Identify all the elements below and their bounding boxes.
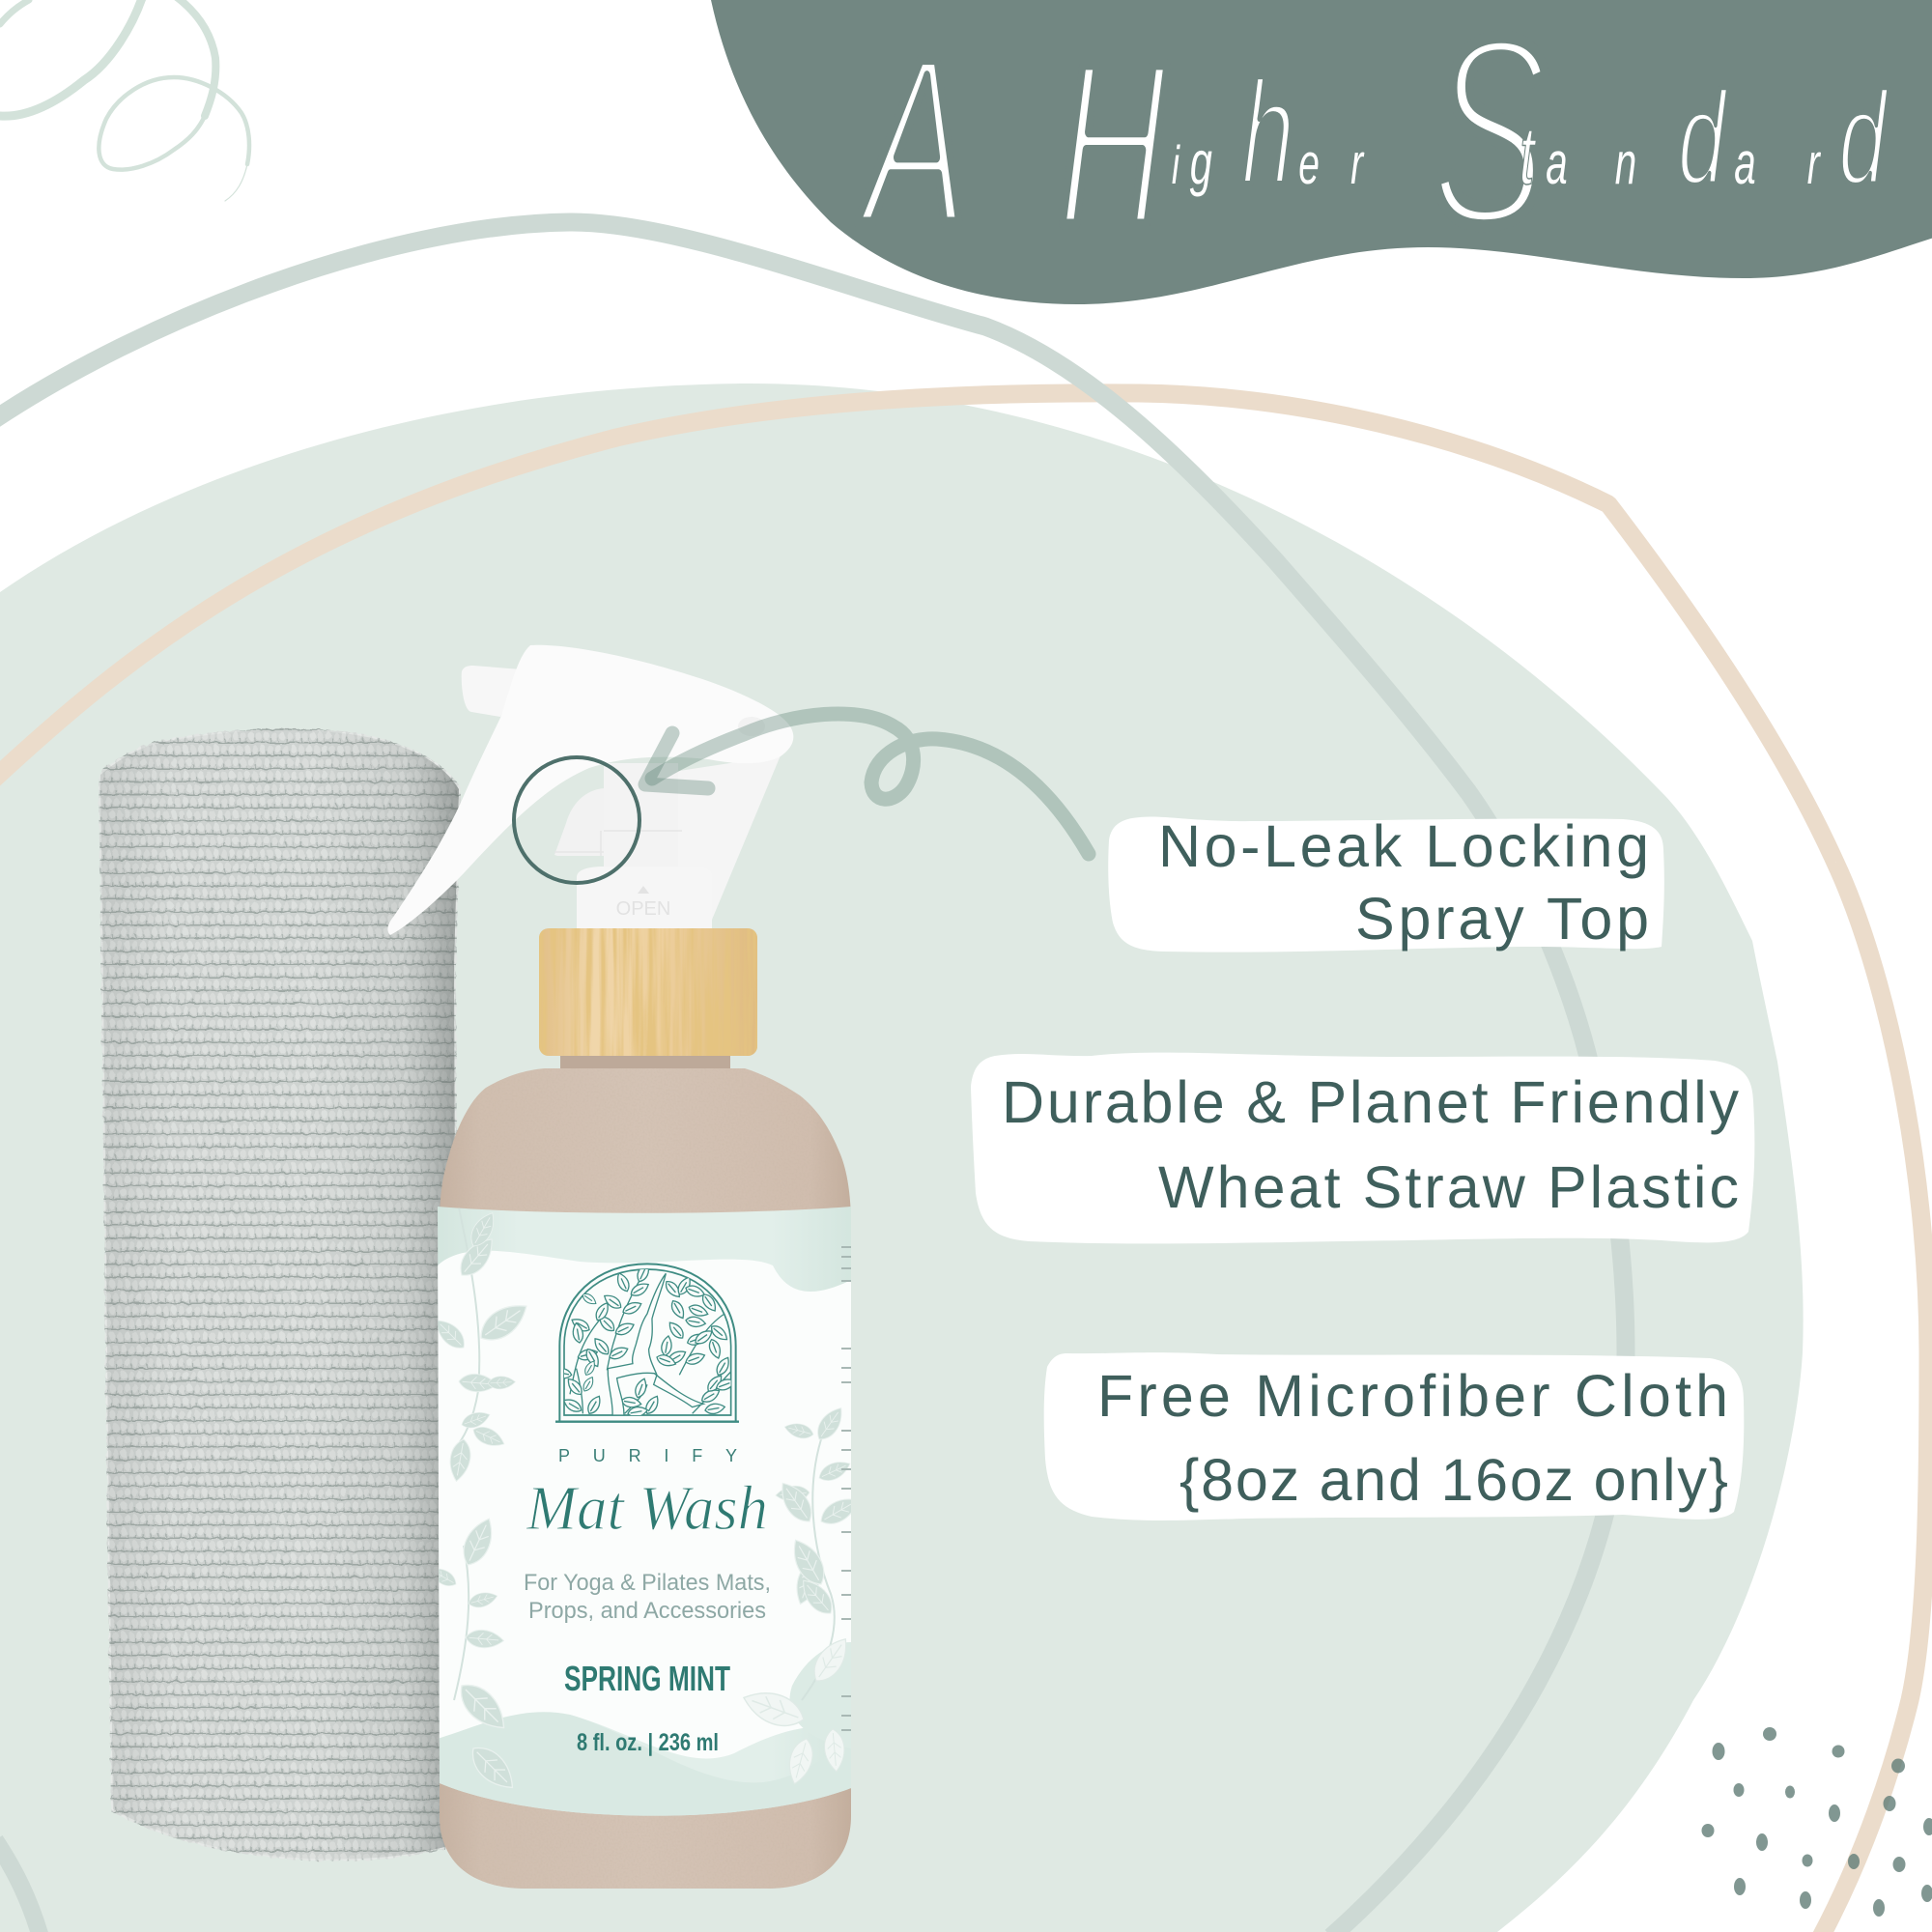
pivot [738,717,765,736]
product description: Props, and Accessories [528,1598,766,1624]
label stems [454,1208,835,1700]
title: A [857,8,1005,272]
callout: no-leak spray top [1108,813,1664,952]
title: n [1615,130,1636,197]
title: t [1520,110,1537,202]
yoga figure [608,1273,703,1415]
title: r [1807,130,1821,196]
purify text: PURIFY [558,1446,737,1465]
sage curved line [0,222,1626,1932]
microfiber cloth [99,728,461,1861]
callout: wheat straw plastic [971,1053,1754,1243]
label [427,1203,863,1831]
header blob [711,0,1932,304]
label side text lines [841,1246,851,1731]
title: g [1190,128,1212,197]
side spout [554,788,604,856]
bottle [427,928,863,1889]
nozzle stub [462,666,522,717]
title: a [1546,130,1568,197]
scent name: SPRING MINT [564,1659,730,1698]
bottle neck [560,1053,730,1070]
collar [577,867,712,929]
callout text: No-Leak Locking [1158,813,1649,879]
wood cap [539,928,757,1056]
sage corner line [0,1840,41,1932]
open label: OPEN [616,898,670,920]
callout text: Durable & Planet Friendly [1002,1069,1739,1135]
callout text: Free Microfiber Cloth [1097,1363,1728,1429]
title: H [1058,14,1168,273]
product description: For Yoga & Pilates Mats, [524,1570,771,1596]
callout text: Wheat Straw Plastic [1158,1154,1739,1220]
callout: free microfiber cloth [1044,1352,1744,1520]
title: e [1298,130,1320,196]
callout text [1002,1069,1739,1220]
title: d [1678,65,1728,213]
highlight circle [514,757,639,883]
label white leaves [743,1638,846,1783]
title: r [1350,130,1374,196]
spray trigger head [387,645,793,935]
tan curved line [0,393,1928,1932]
shroud [387,645,793,935]
curved arrow [645,714,1089,854]
bottle texture [440,1068,851,1889]
decorative dots [1702,1727,1932,1917]
yoga logo arch [551,1262,739,1422]
product description [524,1570,771,1624]
title: h [1241,50,1294,215]
title: d [1838,65,1889,213]
neck [604,763,678,869]
title: i [1172,135,1180,196]
label white field [438,1251,851,1758]
callout text [1097,1363,1728,1513]
neck detail [554,831,682,856]
label corner blob [790,1642,851,1748]
callout text: {8oz and 16oz only} [1179,1447,1728,1513]
title: a [1734,130,1756,197]
label right leaves [775,1407,851,1613]
callout text [1158,813,1649,952]
bottle body [440,1068,851,1889]
mint background blob [0,384,1804,1932]
open triangle [638,886,649,894]
callout text: Spray Top [1355,886,1649,952]
logo vines [564,1269,731,1415]
size text: 8 fl. oz. | 236 ml [577,1729,719,1756]
mat wash script: Mat Wash [526,1473,768,1544]
label bottom wave [438,1712,851,1826]
label left leaves [438,1213,527,1788]
scribble [0,0,249,201]
lever [667,755,781,920]
